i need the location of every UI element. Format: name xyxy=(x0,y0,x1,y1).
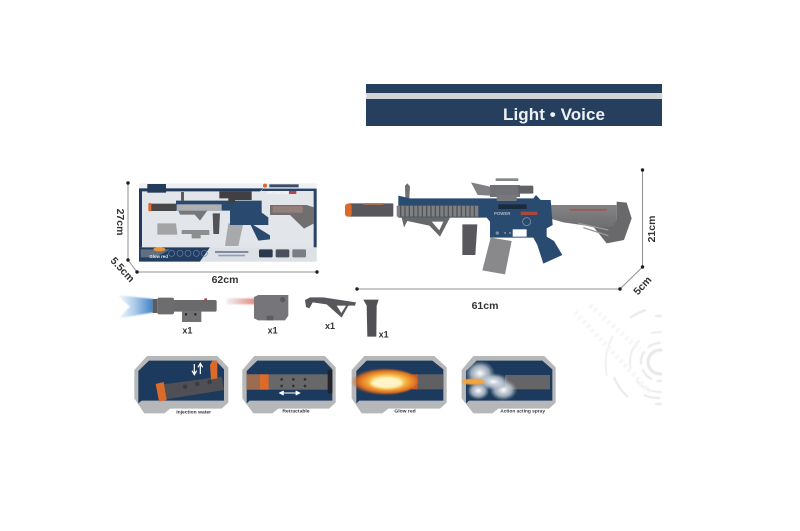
banner: Light Voice xyxy=(366,84,662,126)
box dimensions xyxy=(108,181,319,286)
magazine xyxy=(482,238,512,274)
banner title: Light • Voice xyxy=(503,105,605,124)
caption: Retractable xyxy=(282,409,310,415)
receiver xyxy=(398,195,562,264)
accessory: vertical grip xyxy=(363,300,389,340)
label 27cm: 27cm xyxy=(114,209,126,235)
accessory: vertical grip: x1 xyxy=(379,330,389,340)
feature panel: Retractable xyxy=(242,356,336,415)
product box xyxy=(139,183,317,262)
accessory: laser xyxy=(227,295,288,335)
feature panel: Action acting spray xyxy=(462,356,556,414)
caption: Action acting spray xyxy=(500,408,545,414)
label 61cm: 61cm xyxy=(472,300,498,312)
boxed gun xyxy=(148,191,314,246)
vertical grip xyxy=(462,224,477,255)
front sight xyxy=(405,183,410,198)
accessory: angled grip xyxy=(305,297,356,331)
main gun xyxy=(345,178,632,274)
product box: Glow red xyxy=(149,254,168,259)
rail xyxy=(397,206,478,217)
silencer xyxy=(345,203,393,217)
accessories xyxy=(117,295,389,340)
feature panel: Injection water xyxy=(134,356,228,415)
label 5.5cm: 5.5cm xyxy=(108,255,137,285)
accessory: flashlight xyxy=(117,295,217,335)
feature panel: Glow red xyxy=(351,356,447,415)
accessory: laser: x1 xyxy=(268,325,278,335)
trigger guard xyxy=(513,229,527,237)
label 21cm: 21cm xyxy=(646,216,658,242)
accessory: flashlight: x1 xyxy=(182,325,192,335)
label 62cm: 62cm xyxy=(212,274,238,286)
accessory: angled grip: x1 xyxy=(325,321,335,331)
angled foregrip xyxy=(402,218,450,237)
label 5cm: 5cm xyxy=(631,274,654,298)
gun dimensions xyxy=(355,168,658,312)
stock xyxy=(550,202,632,243)
caption: Injection water xyxy=(176,409,211,415)
scope xyxy=(471,178,533,209)
caption: Glow red xyxy=(394,409,416,415)
watermark: tech circle xyxy=(574,304,662,405)
markings: POWER xyxy=(494,211,511,216)
